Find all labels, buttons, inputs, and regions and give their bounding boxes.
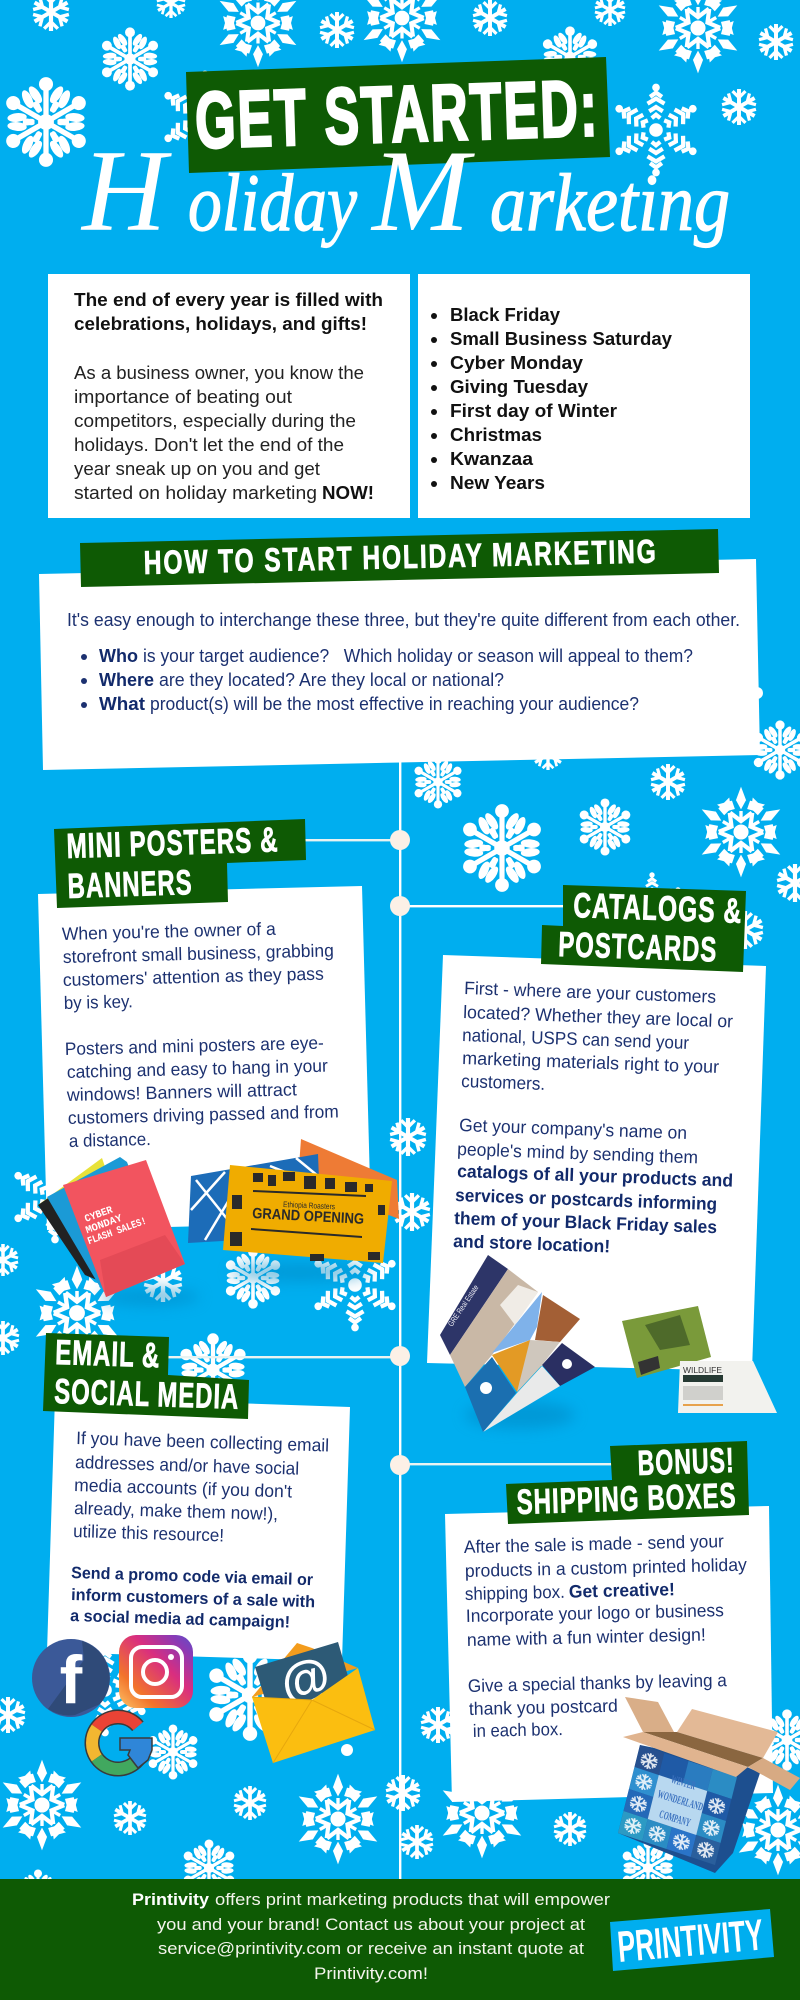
section heading: BANNERS — [67, 863, 193, 906]
intro sentence: It's easy enough to interchange these three, but they're quite different from each other. — [67, 610, 740, 630]
image: postcards — [622, 1306, 777, 1413]
intro body text — [74, 363, 374, 503]
box label text — [656, 1774, 704, 1829]
body text: a social media ad campaign! — [70, 1607, 290, 1632]
intro body text: holidays. Don't let the end of the — [74, 435, 344, 455]
poster headline: MONDAY — [84, 1213, 125, 1237]
body text: and store location! — [453, 1231, 610, 1256]
body text: by is key. — [64, 991, 133, 1013]
question list — [81, 646, 693, 714]
icon: facebook — [32, 1639, 110, 1718]
image: posters — [38, 1157, 200, 1306]
holiday names — [450, 305, 672, 493]
footer text: Printivity.com! — [314, 1964, 428, 1983]
section heading: MINI POSTERS & — [66, 820, 279, 866]
question list: What — [99, 694, 145, 714]
body text: catching and easy to hang in your — [67, 1056, 328, 1082]
body text: people's mind by sending them — [457, 1139, 698, 1167]
body text: If you have been collecting email — [76, 1428, 329, 1456]
title: holiday marketing: arketing — [490, 157, 730, 248]
body text: Get creative! — [569, 1579, 675, 1602]
brochure title: GRE Real Estate — [446, 1283, 481, 1328]
body text: customers. — [461, 1071, 546, 1094]
intro body text: importance of beating out — [74, 387, 292, 407]
section heading: EMAIL & — [55, 1333, 161, 1375]
body text: utilize this resource! — [73, 1521, 224, 1545]
footer text — [132, 1890, 610, 1983]
title: holiday marketing: M — [370, 127, 475, 256]
banner text: Ethiopia Roasters — [283, 1200, 335, 1211]
body text: Get your company's name on — [459, 1115, 687, 1143]
intro body text: NOW! — [322, 483, 374, 503]
question list: Where — [99, 670, 154, 690]
box label text: WONDERLAND — [656, 1788, 704, 1814]
holiday names: Small Business Saturday — [450, 329, 672, 349]
image: brochure — [440, 1255, 595, 1432]
body text: already, make them now!), — [74, 1498, 278, 1524]
holiday names: New Years — [450, 473, 545, 493]
icon: email envelope — [252, 1642, 375, 1763]
section heading: SOCIAL MEDIA — [54, 1372, 240, 1417]
banner text: GRAND OPENING — [252, 1205, 365, 1228]
section banner — [541, 885, 746, 972]
section heading: BONUS! — [637, 1441, 735, 1483]
body text: addresses and/or have social — [75, 1452, 299, 1479]
intro heading: The end of every year is filled with — [74, 290, 383, 310]
intro heading: celebrations, holidays, and gifts! — [74, 314, 367, 334]
panel: mini posters and banners — [38, 819, 371, 1230]
bullets — [431, 313, 437, 487]
section banner — [54, 819, 306, 908]
body text: media accounts (if you don't — [74, 1475, 292, 1501]
body text: customers driving passed and from — [68, 1101, 339, 1128]
body text: Send a promo code via email or — [71, 1564, 314, 1589]
body text — [70, 1428, 329, 1632]
banner decoration — [230, 1172, 385, 1261]
body text: catalogs of all your products and — [457, 1161, 733, 1191]
body text: national, USPS can send your — [462, 1025, 689, 1053]
poster headline: FLASH SALES! — [86, 1216, 148, 1248]
poster headline: CYBER — [83, 1204, 115, 1226]
intro body text: started on holiday marketing — [74, 483, 317, 503]
panel: bonus shipping boxes — [445, 1441, 773, 1802]
image: banners — [188, 1139, 399, 1282]
body text: storefront small business, grabbing — [63, 940, 334, 967]
panel: holiday list — [418, 274, 750, 518]
section banner — [506, 1441, 749, 1524]
body text: located? Whether they are local or — [463, 1002, 733, 1031]
box label text: WINTER — [669, 1774, 697, 1793]
body text: After the sale is made - send your — [464, 1531, 724, 1557]
holiday names: Cyber Monday — [450, 353, 583, 373]
title: holiday marketing: H — [80, 127, 172, 256]
section heading — [66, 820, 279, 906]
body text: First - where are your customers — [464, 978, 716, 1007]
poster headline — [79, 1195, 148, 1248]
body text: products in a custom printed holiday — [465, 1555, 747, 1581]
body text: name with a fun winter design! — [467, 1625, 706, 1650]
question list: product(s) will be the most effective in reaching your audience? — [150, 694, 639, 714]
body text — [62, 919, 339, 1151]
panel: how to start — [39, 529, 760, 770]
timeline line and nodes — [168, 745, 612, 1880]
holiday names: Kwanzaa — [450, 449, 534, 469]
section heading — [54, 1333, 240, 1417]
footer text: you and your brand! Contact us about your project at — [157, 1915, 585, 1934]
title: holiday marketing: oliday — [188, 157, 357, 248]
postcard text: WILDLIFE — [683, 1366, 722, 1375]
section heading: POSTCARDS — [558, 925, 718, 970]
footer text: offers print marketing products that will empower — [215, 1890, 610, 1909]
body text: windows! Banners will attract — [66, 1079, 297, 1105]
body text: thank you postcard — [469, 1696, 618, 1719]
body text: in each box. — [473, 1719, 563, 1741]
holiday names: Christmas — [450, 425, 542, 445]
icon: google — [92, 1717, 152, 1769]
footer text: Printivity — [132, 1890, 210, 1909]
title banner — [186, 57, 610, 173]
panel: intro — [48, 274, 410, 518]
icon: instagram — [119, 1635, 193, 1708]
section banner — [80, 529, 719, 587]
image: shipping box — [618, 1697, 800, 1873]
panel: catalogs and postcards — [427, 885, 766, 1371]
footer text: service@printivity.com or receive an instant quote at — [158, 1939, 584, 1958]
body text: a distance. — [69, 1129, 151, 1151]
body text: marketing materials right to your — [462, 1048, 719, 1077]
question list: Who — [99, 646, 138, 666]
body text: Give a special thanks by leaving a — [468, 1670, 728, 1696]
intro body text: As a business owner, you know the — [74, 363, 364, 383]
title block — [80, 57, 730, 256]
holiday names: Black Friday — [450, 305, 560, 325]
section heading — [558, 886, 743, 970]
section heading — [516, 1441, 737, 1522]
body text: customers' attention as they pass — [63, 964, 324, 990]
body text: shipping box. — [465, 1582, 565, 1604]
body text — [453, 978, 733, 1256]
body text: them of your Black Friday sales — [454, 1208, 717, 1237]
body text: services or postcards informing — [455, 1185, 717, 1214]
panel: email and social media — [43, 1333, 350, 1661]
title: get started: GET STARTED: — [194, 63, 600, 165]
section banner — [43, 1333, 249, 1419]
intro body text: competitors, especially during the — [74, 411, 356, 431]
box label text: COMPANY — [658, 1809, 692, 1829]
question list: are they located? Are they local or national? — [159, 670, 504, 690]
holiday names: Giving Tuesday — [450, 377, 588, 397]
body text: When you're the owner of a — [62, 919, 277, 944]
box front tiles — [618, 1745, 737, 1865]
holiday names: First day of Winter — [450, 401, 617, 421]
body text: inform customers of a sale with — [71, 1586, 315, 1611]
icon: facebook: f — [60, 1642, 83, 1718]
body text: Posters and mini posters are eye- — [65, 1033, 324, 1059]
body text: Incorporate your logo or business — [466, 1600, 724, 1626]
footer band — [0, 1879, 800, 2000]
icon: email envelope: @ — [275, 1646, 336, 1712]
intro body text: year sneak up on you and get — [74, 459, 320, 479]
intro heading — [74, 290, 383, 334]
question list: is your target audience? Which holiday or season will appeal to them? — [143, 646, 693, 666]
body text — [464, 1531, 747, 1741]
